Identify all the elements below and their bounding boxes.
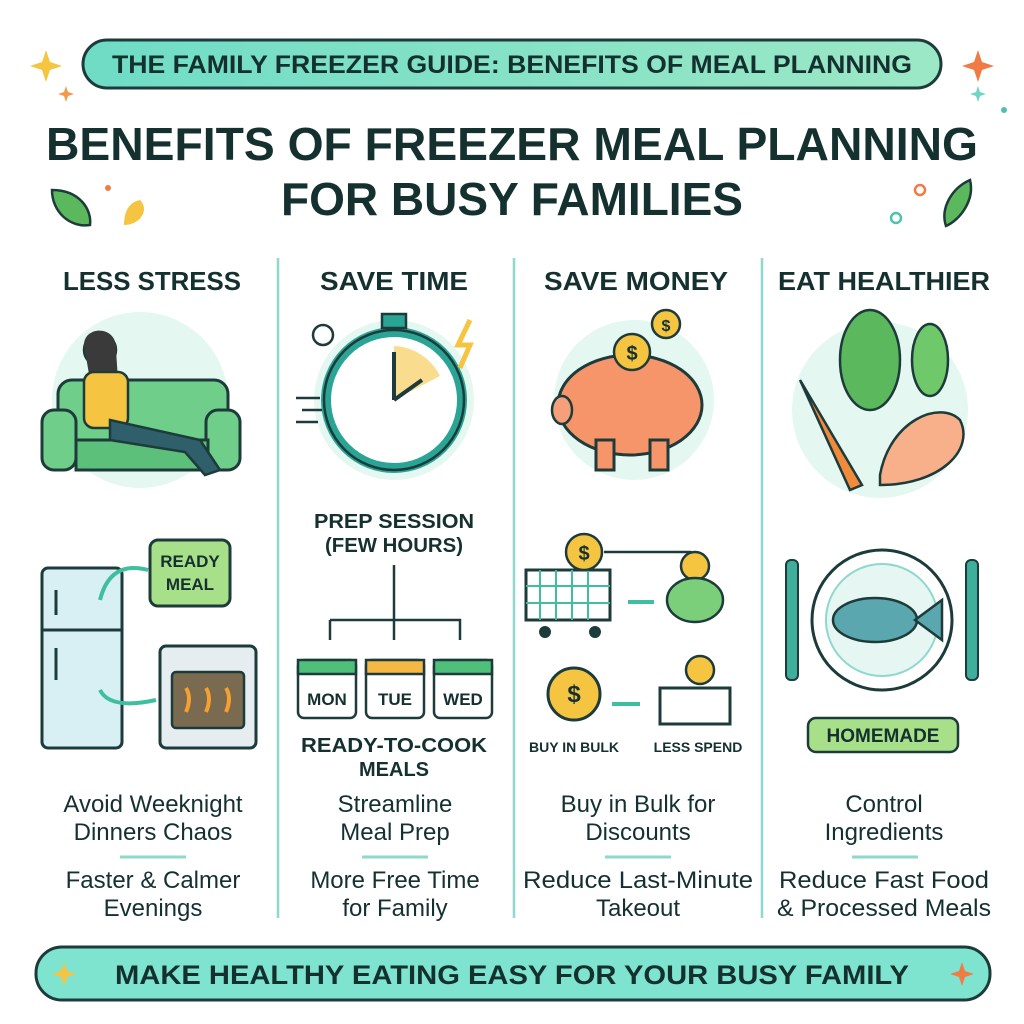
bottom text blocks: Control (845, 791, 923, 818)
bottom text blocks: Takeout (596, 895, 680, 922)
bottom text blocks: Buy in Bulk for (561, 791, 715, 818)
bottom text blocks: Discounts (585, 819, 691, 846)
top banner (83, 40, 941, 88)
panel: save time illustration (296, 314, 492, 781)
panel: save time illustration: WED (443, 690, 483, 709)
main title: FOR BUSY FAMILIES (281, 173, 743, 225)
column headers (63, 266, 990, 296)
bottom text blocks: More Free Time (310, 867, 480, 894)
dividers (278, 258, 762, 918)
small fridge, oven, ready meal (42, 568, 122, 748)
bottom banner: MAKE HEALTHY EATING EASY FOR YOUR BUSY FAMILY (115, 960, 909, 990)
panel: save money illustration: BUY IN BULK (529, 739, 619, 755)
column headers: SAVE TIME (320, 266, 468, 296)
bottom banner (36, 947, 990, 1000)
panel: less stress illustration: MEAL (166, 575, 214, 594)
bottom text blocks: Meal Prep (340, 819, 450, 846)
bottom text blocks: & Processed Meals (777, 895, 991, 922)
bottom text blocks: for Family (342, 895, 448, 922)
panel: save time illustration: (FEW HOURS) (325, 535, 463, 557)
bottom text blocks: Streamline (338, 791, 452, 818)
panel: less stress illustration: READY (160, 552, 220, 571)
panel: save money illustration: $ (578, 543, 590, 565)
bottom text blocks: Faster & Calmer (66, 867, 240, 894)
panel: save time illustration: PREP SESSION (314, 511, 474, 533)
panel: eat healthier illustration: HOMEMADE (827, 726, 939, 747)
panel: save money illustration: $ (626, 343, 638, 365)
panel: save money illustration: LESS SPEND (654, 739, 742, 755)
main title: BENEFITS OF FREEZER MEAL PLANNING (46, 118, 978, 170)
panel: save time illustration: READY-TO-COOK (301, 735, 488, 757)
main title (46, 118, 978, 225)
bottom text blocks: Dinners Chaos (74, 819, 232, 846)
panel: save time illustration: TUE (378, 690, 412, 709)
icon: leaves (52, 180, 971, 226)
bottom text blocks (63, 791, 991, 922)
bottom text blocks: Reduce Fast Food (779, 867, 989, 894)
column headers: LESS STRESS (63, 266, 241, 296)
panel: save time illustration: MON (307, 690, 347, 709)
panel: save money illustration: $ (567, 681, 581, 708)
bottom text blocks: Avoid Weeknight (63, 791, 243, 818)
decorative sparkles (30, 50, 1007, 223)
top banner: THE FAMILY FREEZER GUIDE: BENEFITS OF MEAL PLANNING (112, 51, 912, 79)
column headers: SAVE MONEY (544, 266, 728, 296)
panel: less stress illustration (42, 312, 256, 748)
bottom text blocks: Evenings (104, 895, 202, 922)
bottom text blocks: Ingredients (825, 819, 943, 846)
panel: save time illustration: MEALS (359, 759, 429, 781)
bottom text blocks: Reduce Last-Minute (523, 867, 753, 894)
panel: save money illustration (526, 310, 742, 755)
panel: save money illustration: $ (662, 318, 671, 335)
column headers: EAT HEALTHIER (778, 266, 990, 296)
panel: eat healthier illustration (786, 310, 978, 752)
